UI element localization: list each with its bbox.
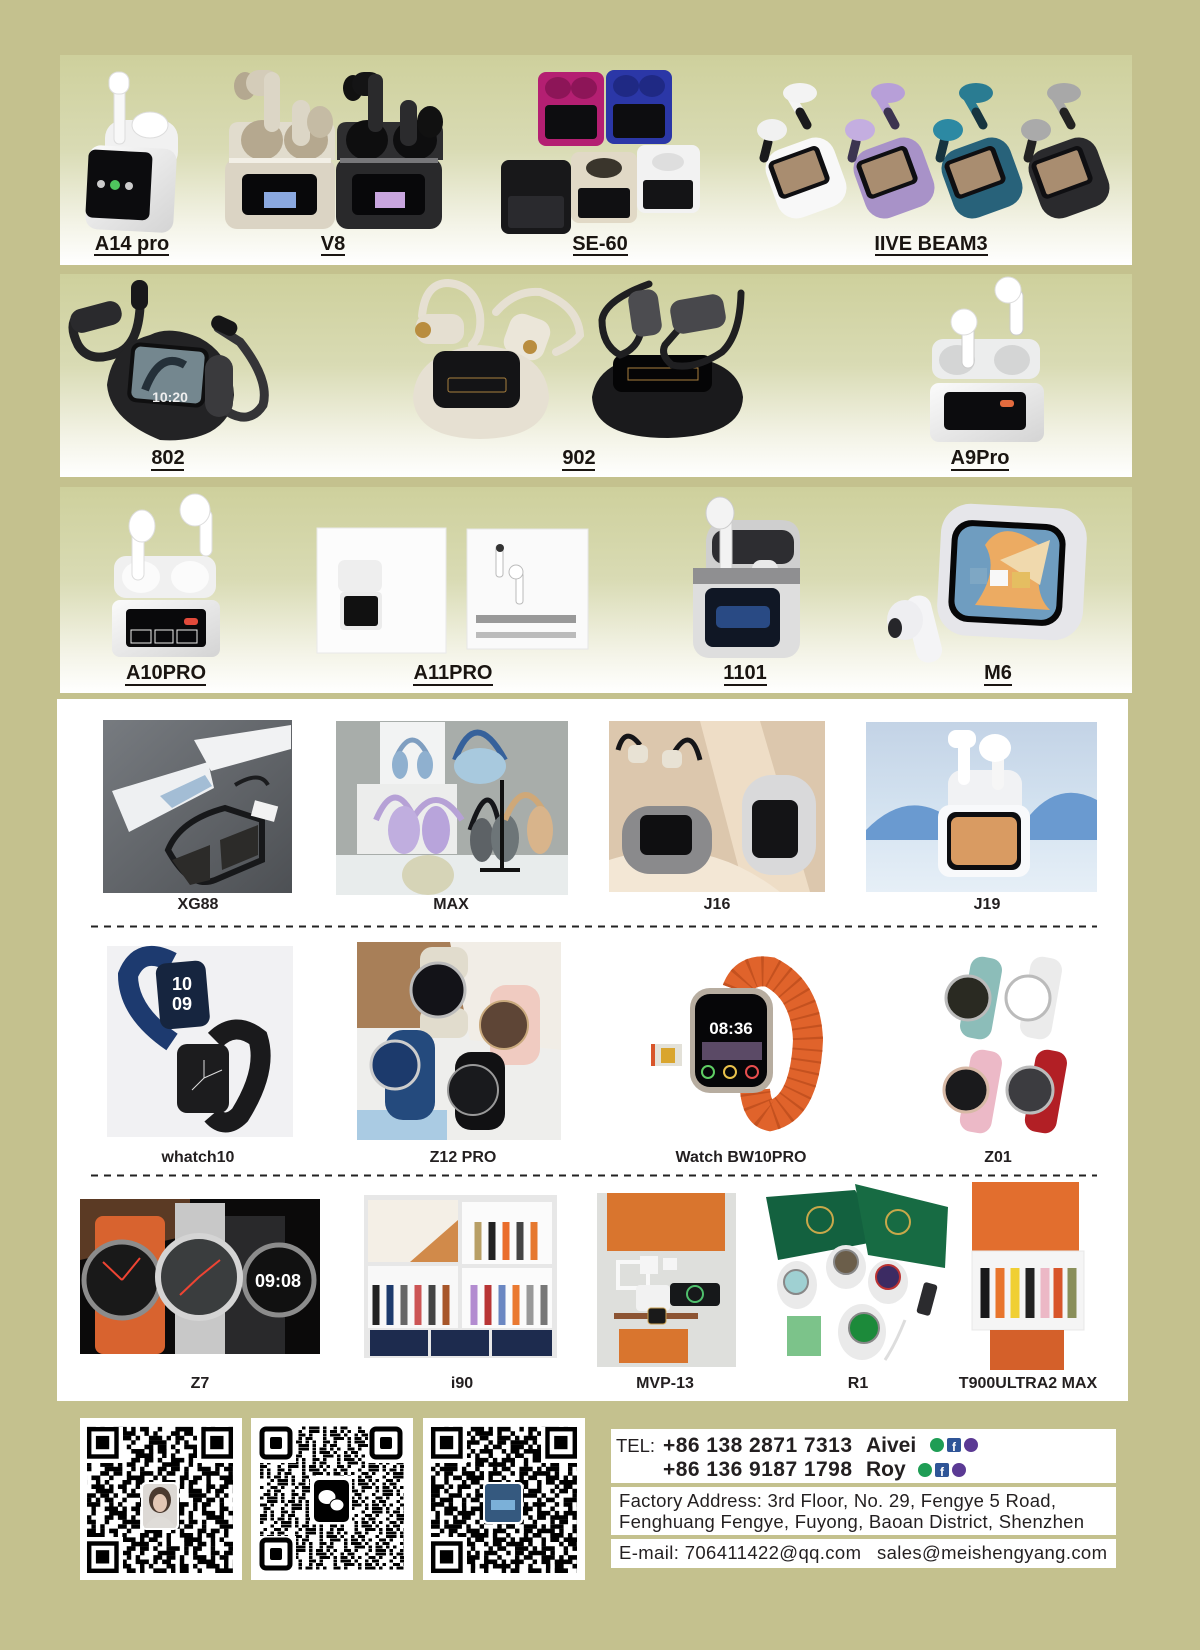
label: R1: R1	[848, 1375, 868, 1392]
product: 802	[68, 280, 264, 440]
label: A9Pro: A9Pro	[951, 447, 1009, 469]
contact: telephone: +86 136 9187 1798	[663, 1458, 852, 1481]
contact: telephone: Aivei	[866, 1434, 916, 1457]
product photo: MAX headphones	[336, 721, 568, 895]
panel: earbuds row 3	[60, 487, 1132, 693]
label: A10PRO: A10PRO	[126, 662, 206, 684]
product photo: XG88 glasses	[103, 720, 292, 893]
icons: WhatsApp, Facebook, Viber: f	[952, 1440, 957, 1454]
product photo: T900ULTRA2 MAX set	[972, 1182, 1084, 1370]
contact: telephone: TEL:	[616, 1435, 655, 1456]
product photo: i90 set	[364, 1195, 557, 1358]
product photo: J16	[609, 721, 825, 892]
icons: WhatsApp, Facebook, Viber	[918, 1438, 978, 1479]
icons: WhatsApp, Facebook, Viber: f	[940, 1465, 945, 1479]
product photo: Watch BW10PRO	[651, 971, 808, 1116]
label: J19: J19	[974, 896, 1000, 913]
panel: earbuds row 2	[60, 274, 1132, 477]
label: SE-60: SE-60	[572, 233, 628, 255]
label: MAX: MAX	[433, 896, 469, 913]
label: 1101: 1101	[723, 662, 767, 684]
contact: factory address: Factory Address: 3rd Floor, No. 29, Fengye 5 Road,	[619, 1490, 1056, 1511]
label: 902: 902	[562, 447, 596, 469]
contact: email: sales@meishengyang.com	[877, 1542, 1107, 1563]
label: 802: 802	[151, 447, 185, 469]
product photo: whatch10	[107, 946, 293, 1137]
product: V8	[225, 70, 443, 229]
label: MVP-13: MVP-13	[636, 1375, 694, 1392]
contact: telephone: Roy	[866, 1458, 906, 1481]
label: Z7: Z7	[191, 1375, 209, 1392]
row divider	[91, 926, 1097, 928]
label: XG88: XG88	[178, 896, 219, 913]
label: whatch10: whatch10	[161, 1149, 235, 1166]
product photo: R1 watches	[766, 1184, 948, 1360]
label: A14 pro: A14 pro	[95, 233, 169, 255]
label: V8: V8	[321, 233, 345, 255]
contact: email: E-mail: 706411422@qq.com	[619, 1542, 861, 1563]
product photo: Z7 watches: 09:08	[255, 1271, 301, 1291]
product: A10PRO	[112, 494, 220, 657]
product photo: Watch BW10PRO: 08:36	[709, 1019, 753, 1038]
product: A14 pro	[85, 72, 178, 233]
label: M6: M6	[984, 662, 1012, 684]
label: J16: J16	[704, 896, 730, 913]
product: A11PRO	[317, 528, 588, 653]
QR code: product	[423, 1418, 585, 1580]
contact: factory address: Fenghuang Fengye, Fuyong, Baoan District, Shenzhen	[619, 1511, 1084, 1532]
QR code: WeChat	[251, 1418, 413, 1580]
product: 902	[413, 283, 743, 439]
product: IIVE BEAM3	[757, 83, 1115, 224]
contact: factory address	[611, 1487, 1116, 1535]
label: Watch BW10PRO: Watch BW10PRO	[676, 1149, 806, 1166]
contact: telephone	[611, 1429, 1116, 1483]
label: i90: i90	[451, 1375, 473, 1392]
label: A11PRO: A11PRO	[414, 662, 492, 684]
product photo: J19	[866, 722, 1097, 892]
product photo: whatch10: 10	[172, 974, 192, 994]
row divider	[91, 1174, 1097, 1176]
contact: email	[611, 1539, 1116, 1568]
contact: telephone: +86 138 2871 7313	[663, 1434, 852, 1457]
product photo: whatch10: 09	[172, 994, 192, 1014]
label: Z12 PRO: Z12 PRO	[430, 1149, 496, 1166]
product photo: MVP-13 set	[597, 1193, 736, 1367]
product photo: Z01 watches	[944, 955, 1069, 1135]
product photo: Z7 watches	[80, 1199, 320, 1354]
QR code: contact person	[80, 1418, 242, 1580]
product: A9Pro	[930, 277, 1044, 442]
product: M6	[887, 502, 1088, 665]
label: Z01: Z01	[984, 1149, 1012, 1166]
panel: earbuds row 1	[60, 55, 1132, 265]
panel: white products catalogue	[57, 699, 1128, 1401]
product: 802: 10:20	[152, 389, 188, 405]
label: IIVE BEAM3: IIVE BEAM3	[874, 233, 988, 255]
product: 1101	[693, 497, 800, 658]
label: T900ULTRA2 MAX: T900ULTRA2 MAX	[959, 1375, 1098, 1392]
product photo: Z12 PRO	[357, 942, 561, 1140]
product: SE-60	[501, 70, 700, 234]
